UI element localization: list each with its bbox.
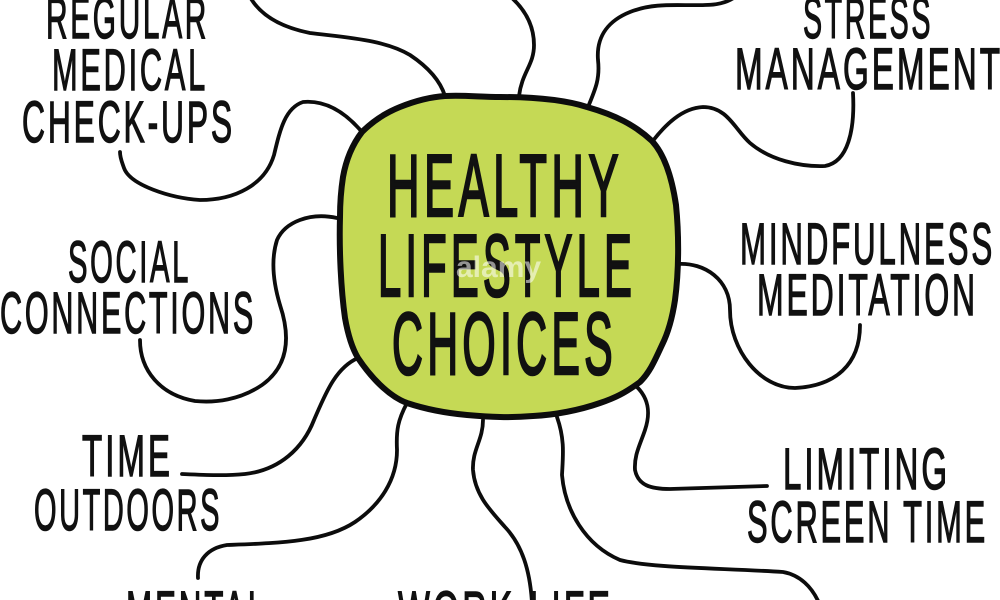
connector: limiting screen time (635, 387, 767, 489)
connector: stress management (652, 93, 853, 166)
label: stress management (735, 0, 1000, 102)
connector: top-left branch (250, 0, 445, 96)
label: regular medical check-ups: CHECK-UPS (22, 90, 235, 155)
connector: top-middle branch (512, 0, 534, 96)
title: healthy lifestyle choices: CHOICES (392, 294, 617, 393)
label: regular medical check-ups: MEDICAL (52, 38, 208, 103)
label: social connections (0, 230, 256, 346)
mind map infographic: LIFESTYLE (378, 216, 636, 315)
connector: mindfulness meditation (677, 264, 860, 388)
label: time outdoors (34, 424, 222, 543)
connector: regular medical check-ups (120, 102, 362, 200)
title: healthy lifestyle choices (378, 136, 636, 393)
label: social connections: SOCIAL (68, 230, 191, 295)
label: time outdoors: TIME (82, 424, 173, 489)
label: limiting screen time (747, 437, 988, 555)
connector: top-right branch (588, 0, 735, 107)
label: social connections: CONNECTIONS (0, 281, 256, 346)
connector: work-life branch (473, 420, 532, 600)
watermark: alamy (456, 251, 541, 284)
central panel: green rounded blob (340, 96, 678, 417)
label: regular medical check-ups (22, 0, 235, 155)
connector: bottom-right branch (557, 417, 819, 600)
label: mindfulness meditation (740, 212, 995, 328)
connector: time outdoors (182, 358, 358, 475)
connector: social connections (140, 216, 337, 402)
connector: mental branch (198, 403, 407, 578)
mind map infographic: OUTDOORS (34, 478, 222, 543)
title: healthy lifestyle choices: HEALTHY (387, 136, 623, 235)
